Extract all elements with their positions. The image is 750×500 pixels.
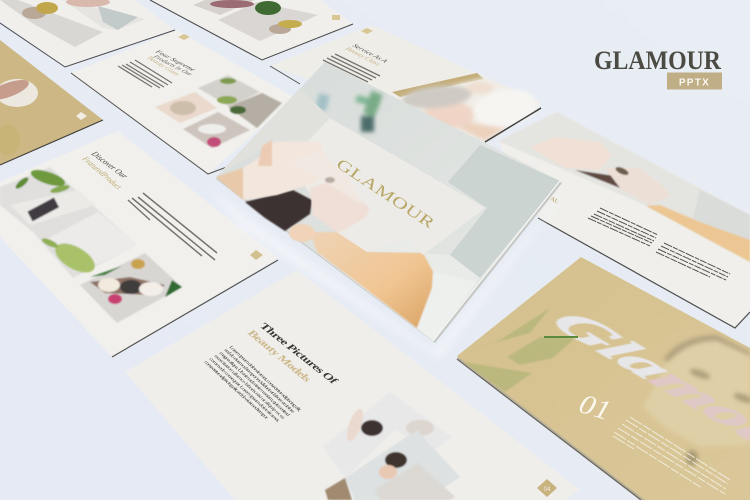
PPTX badge	[667, 72, 722, 90]
panel: tan slide at left edge	[0, 40, 103, 165]
panel: top-center slide	[150, 0, 353, 60]
gold page number marker	[537, 479, 557, 497]
panel: face mask slide at right	[498, 112, 750, 328]
body text lines	[118, 60, 172, 88]
gold page number marker: 04	[544, 487, 551, 493]
slide subheading: FeaturedProduct	[79, 155, 123, 191]
gold page marker	[178, 34, 190, 40]
photo: body	[245, 190, 477, 341]
slide number: 01	[573, 390, 617, 426]
paragraph: magna aliqua. Ut enim ad minim veniam, quis nostrud	[217, 351, 291, 417]
paragraph: sed do eiusmod tempor incididunt ut labore et dolore	[222, 348, 296, 415]
body text lines	[128, 193, 217, 260]
body text lines	[323, 54, 380, 82]
lower pale background	[367, 238, 480, 341]
slide heading: Discover Our	[88, 150, 130, 180]
body text block two	[656, 243, 730, 280]
slide subheading: Beauty Models	[245, 328, 315, 384]
slide subheading: Beauty Class	[344, 46, 383, 67]
pale left wall	[216, 88, 330, 177]
photo: woman with hair cap	[400, 78, 541, 141]
blurred background plant and bottle	[315, 91, 383, 132]
photo collage	[323, 392, 460, 500]
panel: Four Supreme Products slide	[71, 30, 295, 174]
gold strip	[392, 73, 484, 97]
PPTX badge: PPTX	[679, 78, 710, 88]
photo: plant and sign	[0, 167, 137, 279]
brand title: GLAMOUR	[594, 46, 721, 75]
gold page marker	[250, 250, 263, 260]
panel: Discover Our Featured Product slide	[0, 131, 278, 357]
panel: gold Glamour 01 slide	[456, 257, 750, 500]
panel: Service As A slide	[270, 25, 541, 142]
slide heading: Four Supreme	[153, 48, 198, 73]
photo: faded face	[643, 335, 750, 466]
gold page marker	[361, 28, 373, 34]
paragraph: exercitation ullamco laboris nisi ut aliquip ex ea	[212, 354, 286, 421]
hair	[245, 190, 312, 231]
slide subheading: Products In Our	[151, 53, 195, 77]
paragraph: consectetur adipiscing elit, sed do eiusmod tempor	[202, 360, 269, 420]
ear	[289, 224, 315, 242]
slide heading: Service As A	[351, 43, 390, 64]
paragraph	[202, 345, 303, 424]
photo grid	[155, 75, 282, 148]
sheet mask	[288, 150, 370, 233]
main title: GLAMOUR	[332, 156, 438, 232]
panel: Three Pictures Of Beauty Models slide	[125, 270, 580, 500]
slide gold line: Beauty Glam	[146, 55, 182, 77]
paragraph: Lorem ipsum dolor sit amet, consectetur adipiscing elit,	[227, 345, 303, 413]
hands	[216, 140, 325, 200]
white paragraph lines	[613, 417, 730, 494]
slide heading: Three Pictures Of	[257, 321, 342, 386]
grey-green right panel	[448, 145, 560, 278]
soft white glow beneath slide	[205, 185, 570, 360]
panel: main Glamour cover slide	[205, 62, 570, 360]
photo: coconut bowls	[80, 253, 182, 323]
leaves	[456, 308, 575, 392]
green accent stroke	[544, 336, 578, 338]
photo band	[498, 112, 750, 262]
body text block one	[588, 208, 658, 246]
gold slide label: AL	[549, 196, 559, 205]
paragraph: commodo consequat. Lorem ipsum dolor sit amet,	[207, 357, 281, 424]
translucent title plate	[288, 118, 485, 255]
panel: top-left slide	[0, 0, 175, 67]
